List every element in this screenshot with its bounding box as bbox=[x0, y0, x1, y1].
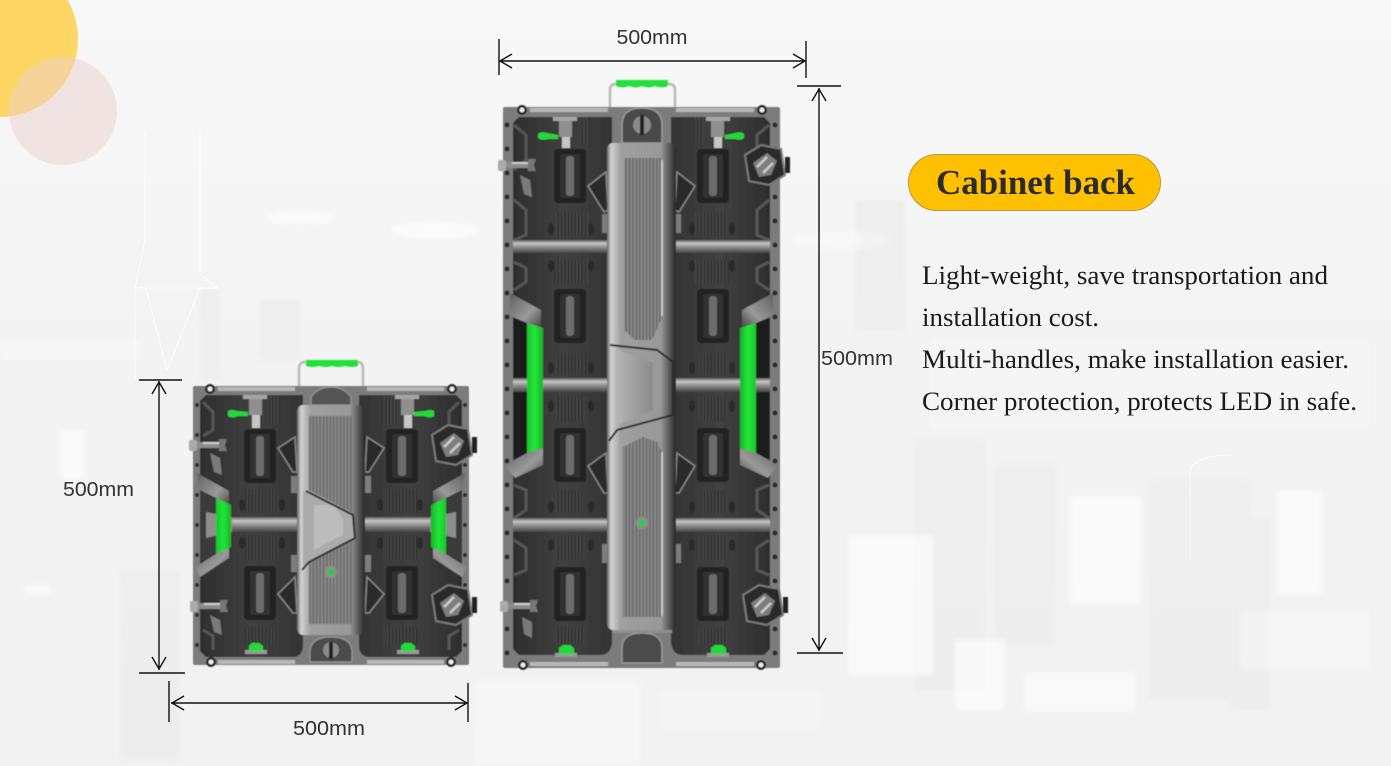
feature description text: installation cost. bbox=[922, 303, 1099, 332]
heading pill: Cabinet back bbox=[908, 154, 1160, 210]
right module half bbox=[671, 117, 778, 655]
right module half bbox=[359, 395, 467, 657]
dimension: right height of large cabinet bbox=[797, 86, 893, 653]
central housing bbox=[607, 143, 676, 630]
frame rivets bbox=[507, 125, 775, 655]
large cabinet back (tall) bbox=[498, 80, 790, 670]
central housing bbox=[297, 405, 365, 635]
dimension: top width of large cabinet bbox=[499, 26, 806, 78]
feature description text: Corner protection, protects LED in safe. bbox=[922, 387, 1357, 416]
feature description text: Light-weight, save transportation and bbox=[922, 261, 1328, 290]
left side cam locks bbox=[498, 159, 538, 638]
feature description text: Multi-handles, make installation easier. bbox=[922, 345, 1349, 374]
cabinet frame bbox=[503, 107, 780, 668]
carry handle with green grip bbox=[299, 360, 363, 387]
small cabinet back (square) bbox=[189, 360, 477, 667]
dimension: bottom width of small cabinet bbox=[169, 681, 468, 740]
green bottom latches bbox=[555, 645, 729, 657]
cabinet frame bbox=[193, 386, 469, 665]
top and bottom knobs bbox=[612, 108, 672, 663]
dimension: bottom width of small cabinet: 500mm bbox=[293, 717, 365, 740]
right side hex connectors bbox=[432, 425, 477, 625]
decorative pink circle bbox=[9, 57, 117, 165]
left module half bbox=[505, 117, 612, 655]
dimension: left height of small cabinet bbox=[63, 380, 185, 673]
dimension: right height of large cabinet: 500mm bbox=[821, 347, 893, 370]
decorative yellow circle bbox=[0, 0, 78, 117]
left side cam locks bbox=[189, 439, 228, 635]
right side hex connectors bbox=[743, 145, 790, 625]
dimension: left height of small cabinet: 500mm bbox=[63, 478, 134, 501]
frame rivets bbox=[197, 405, 465, 650]
heading pill: Cabinet back: Cabinet back bbox=[936, 163, 1136, 202]
top and bottom knobs bbox=[310, 387, 352, 662]
green bottom latches bbox=[245, 643, 419, 654]
carry handle with green grip bbox=[610, 80, 675, 108]
green top latches bbox=[228, 395, 434, 428]
dimension: top width of large cabinet: 500mm bbox=[616, 26, 688, 49]
feature description text bbox=[922, 261, 1357, 416]
green top latches bbox=[538, 117, 744, 148]
left module half bbox=[195, 395, 303, 657]
